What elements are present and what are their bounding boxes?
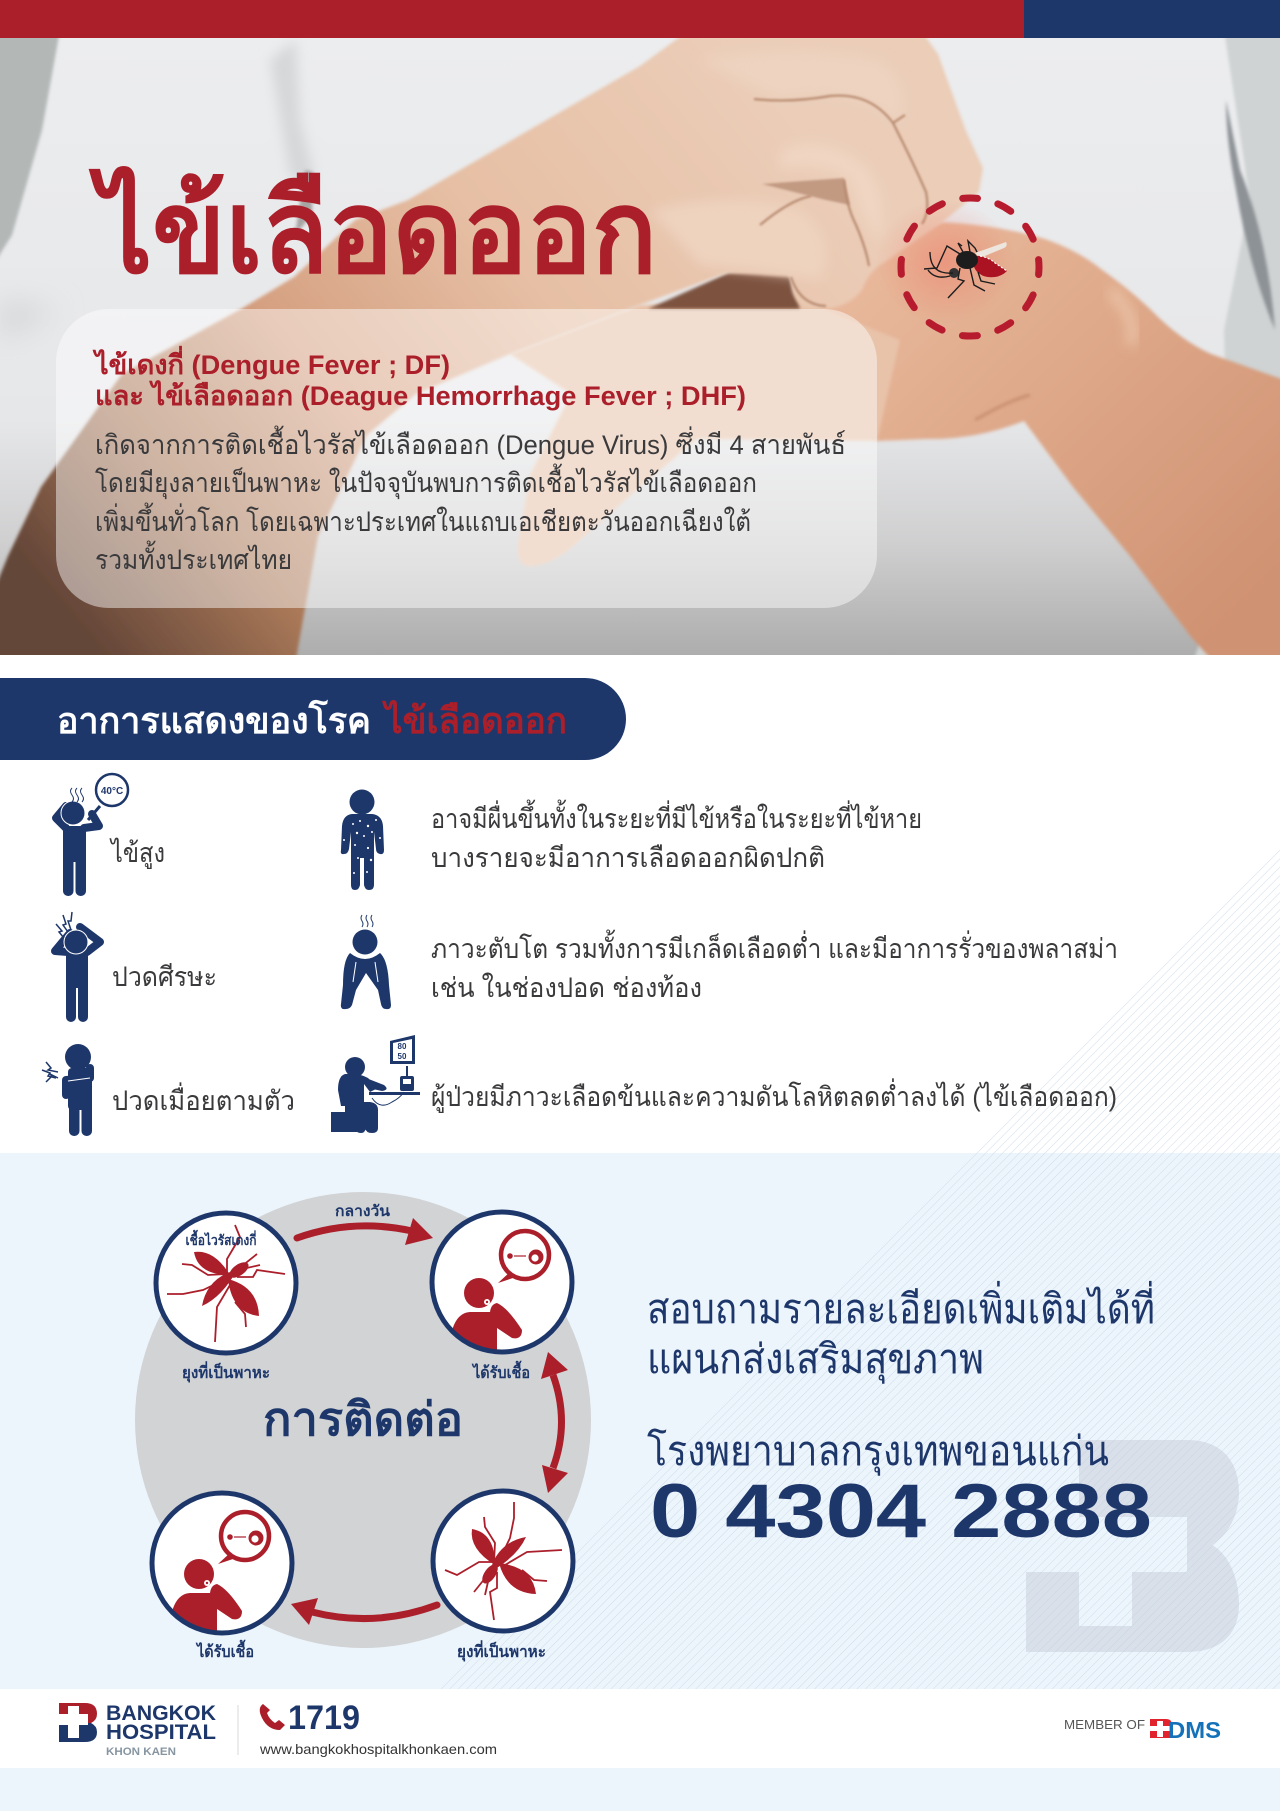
subheading line 1: ไข้เดงกี่ (Dengue Fever ; DF) (92, 345, 450, 380)
watermark: hospital B logo (1026, 1440, 1239, 1652)
arrow: top, daytime (297, 1218, 433, 1245)
section heading bar (0, 678, 626, 760)
label: infected top: ได้รับเชื้อ (471, 1360, 530, 1382)
hero photo: hands scratching a mosquito bite (0, 30, 1280, 670)
logo: member of BDMS (1064, 1717, 1221, 1743)
cycle background disc (135, 1192, 591, 1648)
symptom text: rash line 1: อาจมีผื่นขึ้นทั้งในระยะที่มีไข้หรือในระยะที่ไข้หาย (431, 799, 922, 834)
body text line 1: เกิดจากการติดเชื้อไวรัสไข้เลือดออก (Dengue Virus) ซึ่งมี 4 สายพันธ์ (95, 425, 846, 460)
icon: body ache figure (42, 1044, 92, 1136)
title: ไข้เลือดออก (88, 166, 657, 297)
lower hand and fingers (510, 300, 900, 566)
hotline number: 1719 (288, 1699, 360, 1737)
footer band (0, 1689, 1280, 1768)
logo: Bangkok Hospital: HOSPITAL (106, 1721, 216, 1744)
logo: member of BDMS: DMS (1168, 1717, 1221, 1743)
label: body ache: ปวดเมื่อยตามตัว (112, 1082, 295, 1116)
icon: mosquito inside dashed circle (901, 198, 1039, 336)
icon: blood pressure measurement figure (331, 1035, 420, 1133)
body text line 2: โดยมียุงลายเป็นพาหะ ในปัจจุบันพบการติดเชื้อไวรัสไข้เลือดออก (95, 463, 757, 500)
top colour bar (0, 0, 1280, 38)
circle: infected mosquito top left (156, 1213, 296, 1353)
cycle centre title: การติดต่อ (263, 1393, 463, 1445)
circle: person infected bottom left (152, 1493, 292, 1633)
icon: high fever figure (56, 774, 128, 896)
symptom text: liver line 2: เช่น ในช่องปอด ช่องท้อง (431, 972, 702, 1003)
label: high fever: ไข้สูง (109, 838, 165, 869)
contact section background (0, 1153, 1280, 1811)
shadow gap between the hands (648, 269, 800, 309)
symptom text: liver line 1: ภาวะตับโต รวมทั้งการมีเกล็ดเลือดต่ำ และมีอาการรั่วของพลาสม่า (431, 929, 1118, 964)
contact text line 1: สอบถามรายละเอียดเพิ่มเติมได้ที่ (647, 1281, 1155, 1332)
panel: intro translucent card (56, 309, 877, 608)
icon: blood pressure measurement figure: 50 (398, 1052, 407, 1061)
label: carrier mosquito top: ยุงที่เป็นพาหะ (182, 1361, 270, 1383)
symptom text: rash line 2: บางรายจะมีอาการเลือดออกผิดปกติ (431, 843, 825, 873)
logo: Bangkok Hospital: KHON KAEN (106, 1746, 176, 1758)
circle: mosquito bottom right (433, 1491, 573, 1631)
chart: transmission cycle (135, 1192, 591, 1662)
logo: Bangkok Hospital: BANGKOK (106, 1702, 216, 1725)
icon: headache figure (55, 912, 100, 1022)
icon: phone (260, 1704, 285, 1730)
symptom text: blood pressure: ผู้ป่วยมีภาวะเลือดข้นและความดันโลหิตลดต่ำลงได้ (ไข้เลือดออก) (431, 1078, 1117, 1113)
right arm (780, 222, 1280, 670)
finger highlights and creases (736, 64, 742, 70)
heading text white: อาการแสดงของโรค (57, 699, 371, 741)
body text line 4: รวมทั้งประเทศไทย (95, 540, 292, 575)
label: headache: ปวดศีรษะ (112, 962, 217, 992)
icon: sweating bent-over figure (341, 915, 391, 1009)
subheading line 2: และ ไข้เลือดออก (Deague Hemorrhage Fever ; DHF) (95, 380, 746, 411)
contact text line 3: โรงพยาบาลกรุงเทพขอนแก่น (647, 1428, 1109, 1476)
website: www.bangkokhospitalkhonkaen.com (259, 1741, 497, 1757)
arrow: bottom (291, 1598, 437, 1625)
label: daytime: กลางวัน (335, 1203, 391, 1220)
logo: Bangkok Hospital (59, 1702, 216, 1758)
circle: infected mosquito top left: เชื้อไวรัสเดงกี่ (186, 1229, 256, 1248)
circle: person infected top right (432, 1212, 572, 1352)
label: infected bottom: ได้รับเชื้อ (195, 1639, 254, 1661)
heading text red: ไข้เลือดออก (381, 699, 567, 741)
logo: member of BDMS: MEMBER OF (1064, 1718, 1145, 1732)
arrow: right, double headed (541, 1352, 568, 1493)
bite redness glow (890, 210, 994, 306)
body text line 3: เพิ่มขึ้นทั่วโลก โดยเฉพาะประเทศในแถบเอเชียตะวันออกเฉียงใต้ (95, 502, 751, 537)
contact text line 2: แผนกส่งเสริมสุขภาพ (647, 1336, 984, 1384)
icon: rash figure (341, 790, 384, 890)
label: carrier mosquito bottom: ยุงที่เป็นพาหะ (457, 1640, 546, 1662)
diagonal hatch background (436, 843, 1280, 1689)
icon: high fever figure: 40°C (101, 786, 123, 797)
icon: blood pressure measurement figure: 80 (398, 1042, 407, 1051)
upper arm and fist (0, 36, 983, 670)
phone number: 0 4304 2888 (650, 1469, 1152, 1554)
